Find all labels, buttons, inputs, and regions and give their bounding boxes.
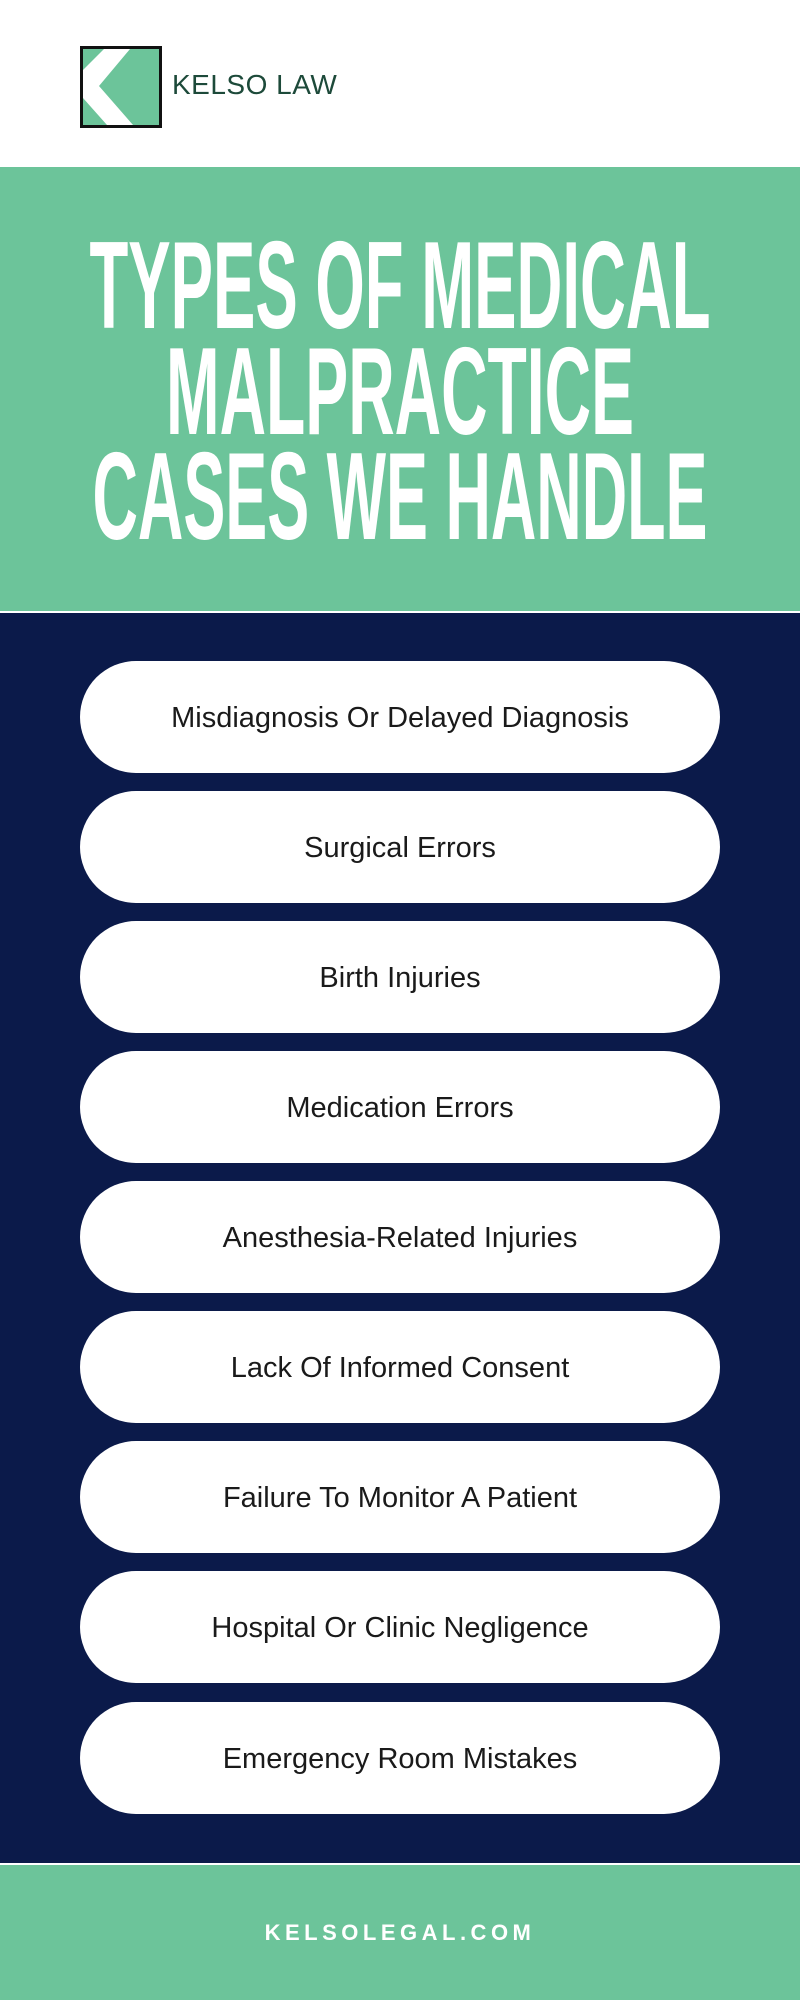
pill 9: Emergency Room Mistakes bbox=[223, 1742, 577, 1774]
panel: list bbox=[0, 613, 800, 1863]
pill 5 bbox=[80, 1181, 720, 1293]
pill 3: Birth Injuries bbox=[319, 962, 481, 994]
pill 5: Anesthesia-Related Injuries bbox=[223, 1222, 577, 1254]
pill 7: Failure To Monitor A Patient bbox=[223, 1482, 577, 1514]
pill 8: Hospital Or Clinic Negligence bbox=[211, 1612, 589, 1644]
pill 9 bbox=[80, 1702, 720, 1814]
pill 3 bbox=[80, 921, 720, 1033]
header band bbox=[0, 167, 800, 611]
pill 1 bbox=[80, 661, 720, 773]
pill 4: Medication Errors bbox=[286, 1092, 514, 1124]
title bbox=[90, 217, 710, 566]
pill 2: Surgical Errors bbox=[304, 832, 496, 864]
logo bbox=[80, 46, 337, 128]
pill 2 bbox=[80, 791, 720, 903]
pill 7 bbox=[80, 1441, 720, 1553]
icon: logo K bbox=[80, 46, 162, 128]
pill 8 bbox=[80, 1571, 720, 1683]
pill 6: Lack Of Informed Consent bbox=[231, 1352, 569, 1384]
pill 6 bbox=[80, 1311, 720, 1423]
footer: KELSOLEGAL.COM bbox=[265, 1920, 535, 1944]
footer bbox=[0, 1865, 800, 2000]
pill 4 bbox=[80, 1051, 720, 1163]
logo text: KELSO LAW bbox=[172, 69, 337, 100]
pill 1: Misdiagnosis Or Delayed Diagnosis bbox=[171, 702, 629, 734]
